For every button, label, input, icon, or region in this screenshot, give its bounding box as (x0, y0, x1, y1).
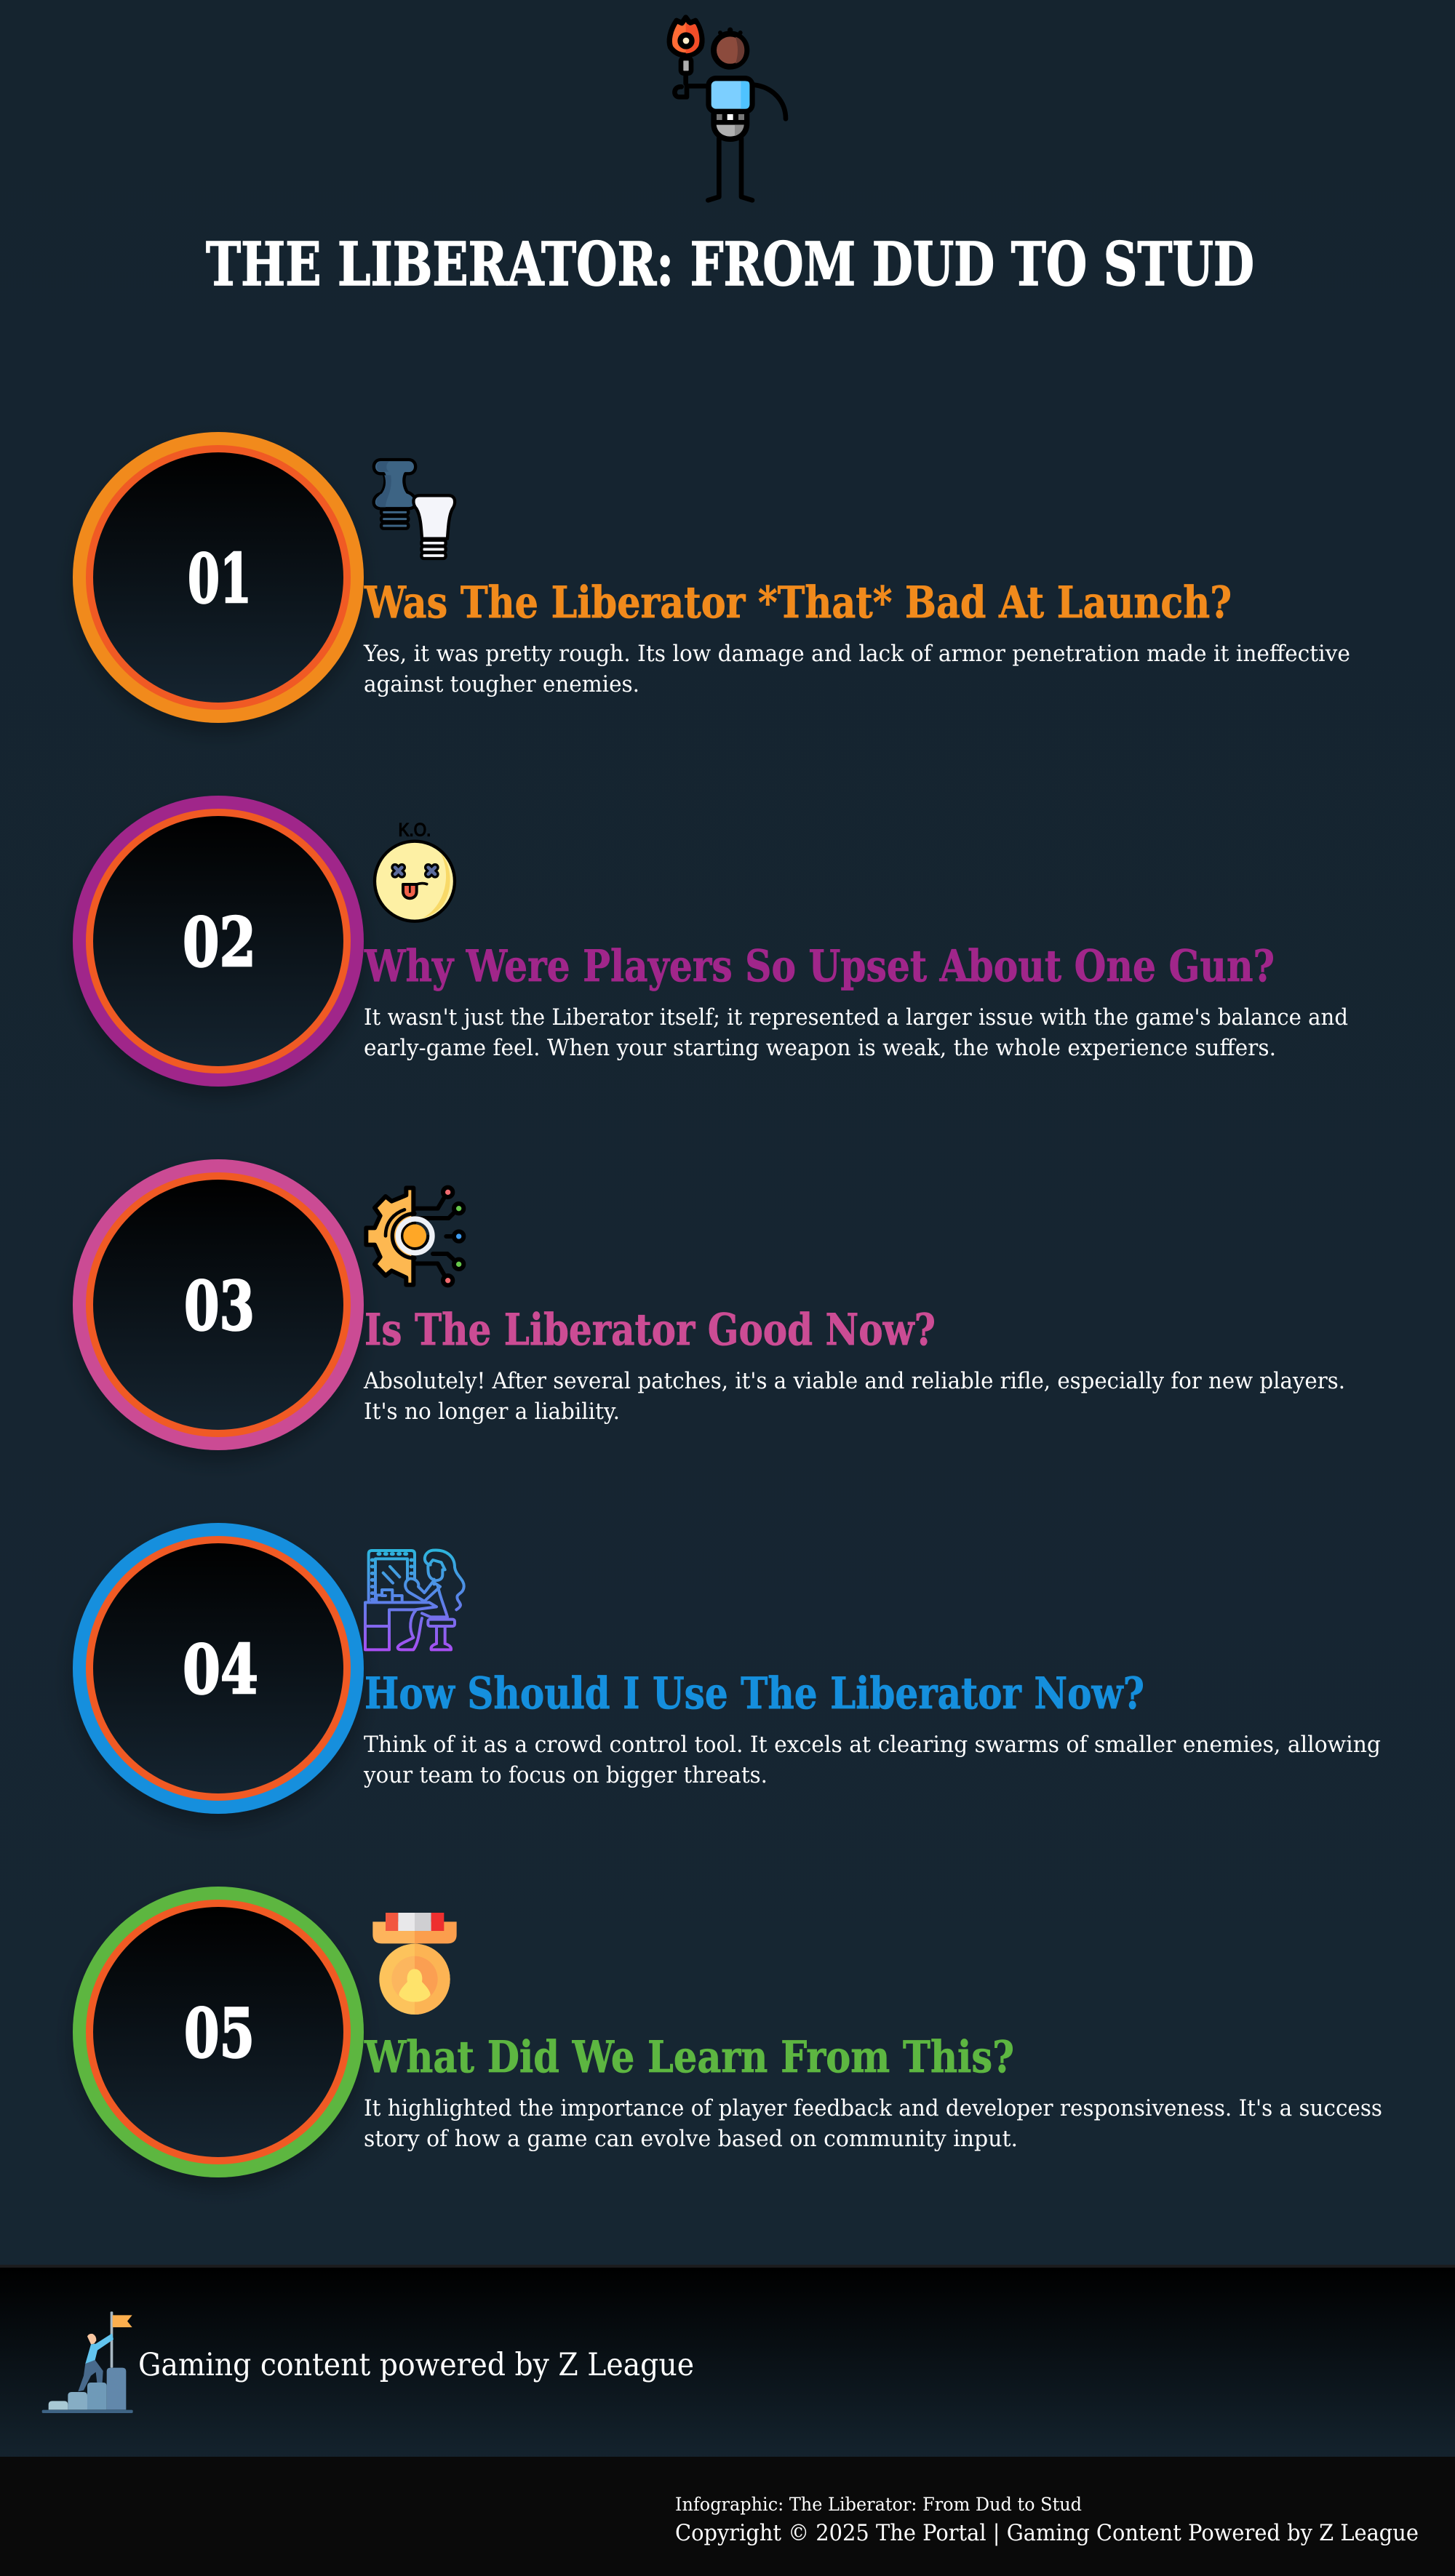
icon: medal (372, 1913, 457, 2015)
icon: hero figure holding torch (669, 17, 786, 200)
icon: two bottle stoppers (374, 460, 455, 559)
body text 05: It highlighted the importance of player feedback and developer responsiveness. It's a success (364, 2095, 1382, 2121)
heading 04: How Should I Use The Liberator Now? (364, 1668, 1144, 1719)
body text 01 (363, 641, 1350, 697)
body text 01: against tougher enemies. (364, 671, 639, 697)
panel: item 05 (73, 1887, 1382, 2177)
icon: knocked out face: K.O. (399, 820, 431, 840)
number badge 01: 01 (188, 539, 252, 618)
number badge 02: 02 (183, 903, 256, 982)
body text 02: It wasn't just the Liberator itself; it represented a larger issue with the game's balance and (364, 1004, 1348, 1031)
number badge 05: 05 (184, 1993, 255, 2073)
heading 01: Was The Liberator *That* Bad At Launch? (364, 577, 1232, 628)
number badge 04 (73, 1523, 364, 1814)
body text 03 (363, 1368, 1345, 1425)
icon: person planting flag on steps (42, 2311, 133, 2413)
heading 02: Why Were Players So Upset About One Gun? (364, 941, 1275, 992)
number badge 03: 03 (184, 1266, 255, 1345)
body text 03: It's no longer a liability. (364, 1399, 620, 1425)
icon: figure at vanity mirror (365, 1550, 464, 1649)
number badge 04: 04 (183, 1630, 258, 1709)
panel: item 04 (73, 1523, 1381, 1814)
panel: item 03 (73, 1159, 1345, 1450)
body text 02 (364, 1004, 1348, 1061)
panel: footer banner (0, 2265, 1455, 2458)
copyright line: Copyright © 2025 The Portal | Gaming Content Powered by Z League (675, 2520, 1419, 2546)
body text 05: story of how a game can evolve based on community input. (364, 2126, 1018, 2152)
icon: half gear with circuit nodes (366, 1188, 463, 1285)
number badge 02 (73, 796, 364, 1087)
footer text: Gaming content powered by Z League (138, 2347, 694, 2383)
number badge 05 (73, 1887, 364, 2177)
body text 01: Yes, it was pretty rough. Its low damage and lack of armor penetration made it ineffective (363, 641, 1350, 667)
panel: item 01 (73, 432, 1350, 723)
panel: copyright bar (0, 2457, 1455, 2576)
body text 04 (363, 1732, 1381, 1788)
heading 05: What Did We Learn From This? (364, 2032, 1014, 2083)
heading 03: Is The Liberator Good Now? (364, 1305, 936, 1356)
number badge 01 (73, 432, 364, 723)
body text 04: your team to focus on bigger threats. (363, 1762, 768, 1788)
infographic caption: Infographic: The Liberator: From Dud to Stud (675, 2494, 1082, 2515)
body text 03: Absolutely! After several patches, it's a viable and reliable rifle, especially for new players. (363, 1368, 1345, 1394)
panel: item 02 (73, 796, 1348, 1087)
body text 02: early-game feel. When your starting weapon is weak, the whole experience suffers. (364, 1035, 1276, 1061)
body text 04: Think of it as a crowd control tool. It excels at clearing swarms of smaller enemies, allowing (364, 1732, 1381, 1758)
body text 05 (364, 2095, 1382, 2152)
icon: knocked out face (375, 820, 455, 921)
number badge 03 (73, 1159, 364, 1450)
